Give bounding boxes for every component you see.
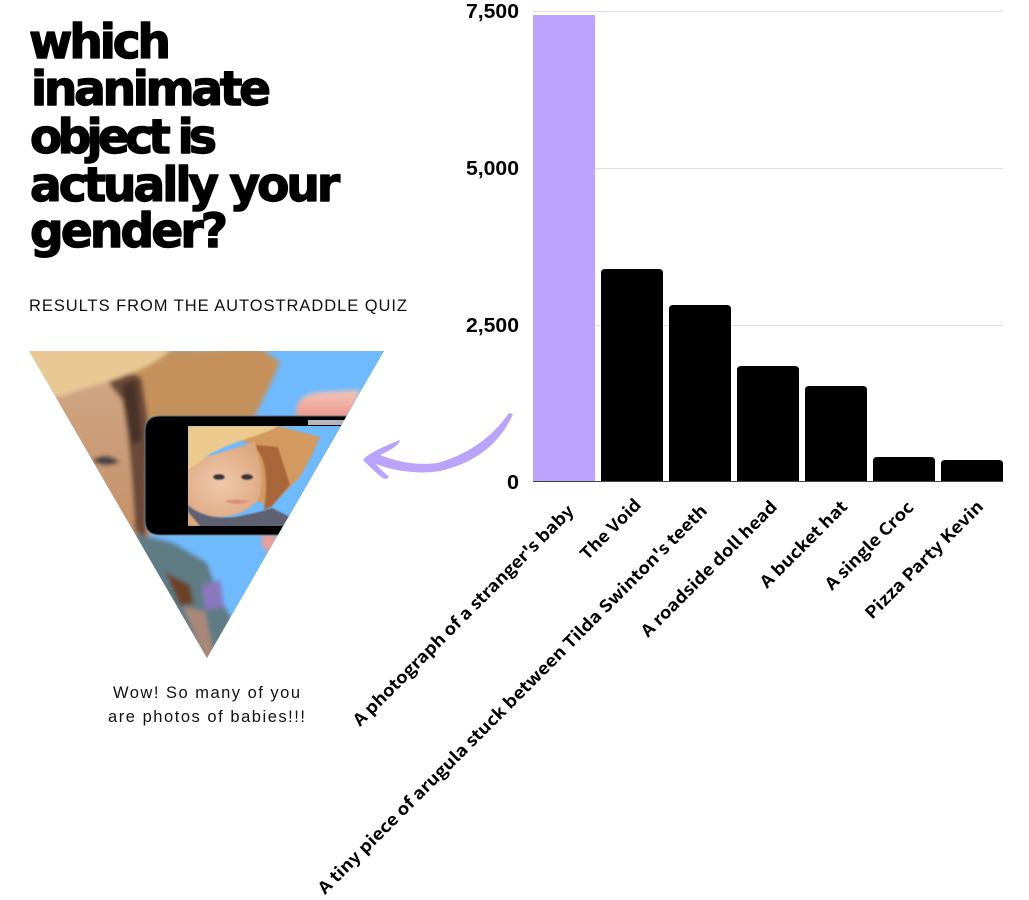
category labels: A photograph of a stranger's baby xyxy=(346,498,579,731)
y axis labels: 2,500 xyxy=(466,315,519,337)
bar chart xyxy=(311,1,1003,899)
arrow pointing from lilac bar to photo xyxy=(363,413,513,479)
title: inanimate xyxy=(31,62,271,117)
category labels: The Void xyxy=(574,492,646,565)
title: which xyxy=(29,15,171,70)
photo shown on phone screen xyxy=(180,426,320,528)
category labels: A bucket hat xyxy=(753,494,852,593)
title: gender? xyxy=(30,204,228,259)
title: object is xyxy=(30,110,217,165)
photo caption: Wow! So many of you xyxy=(113,684,300,702)
subtitle: RESULTS FROM THE AUTOSTRADDLE QUIZ xyxy=(29,297,407,315)
title: actually your xyxy=(30,158,341,213)
category labels: Pizza Party Kevin xyxy=(859,494,988,624)
y axis labels xyxy=(466,1,519,494)
y axis labels: 7,500 xyxy=(466,1,519,23)
category labels: A roadside doll head xyxy=(634,494,782,642)
phone xyxy=(144,416,347,536)
bars xyxy=(533,15,1003,482)
category labels: A tiny piece of arugula stuck between Tilda Swinton's teeth xyxy=(311,498,712,899)
triangular photo of a baby holding a phone xyxy=(15,340,384,662)
category labels: A single Croc xyxy=(818,495,919,595)
photo caption: are photos of babies!!! xyxy=(108,708,305,726)
category labels xyxy=(311,492,988,899)
y axis labels: 0 xyxy=(507,472,519,494)
photo caption xyxy=(108,684,305,726)
grid lines xyxy=(533,12,1003,326)
title xyxy=(29,15,341,259)
y axis labels: 5,000 xyxy=(466,158,519,180)
